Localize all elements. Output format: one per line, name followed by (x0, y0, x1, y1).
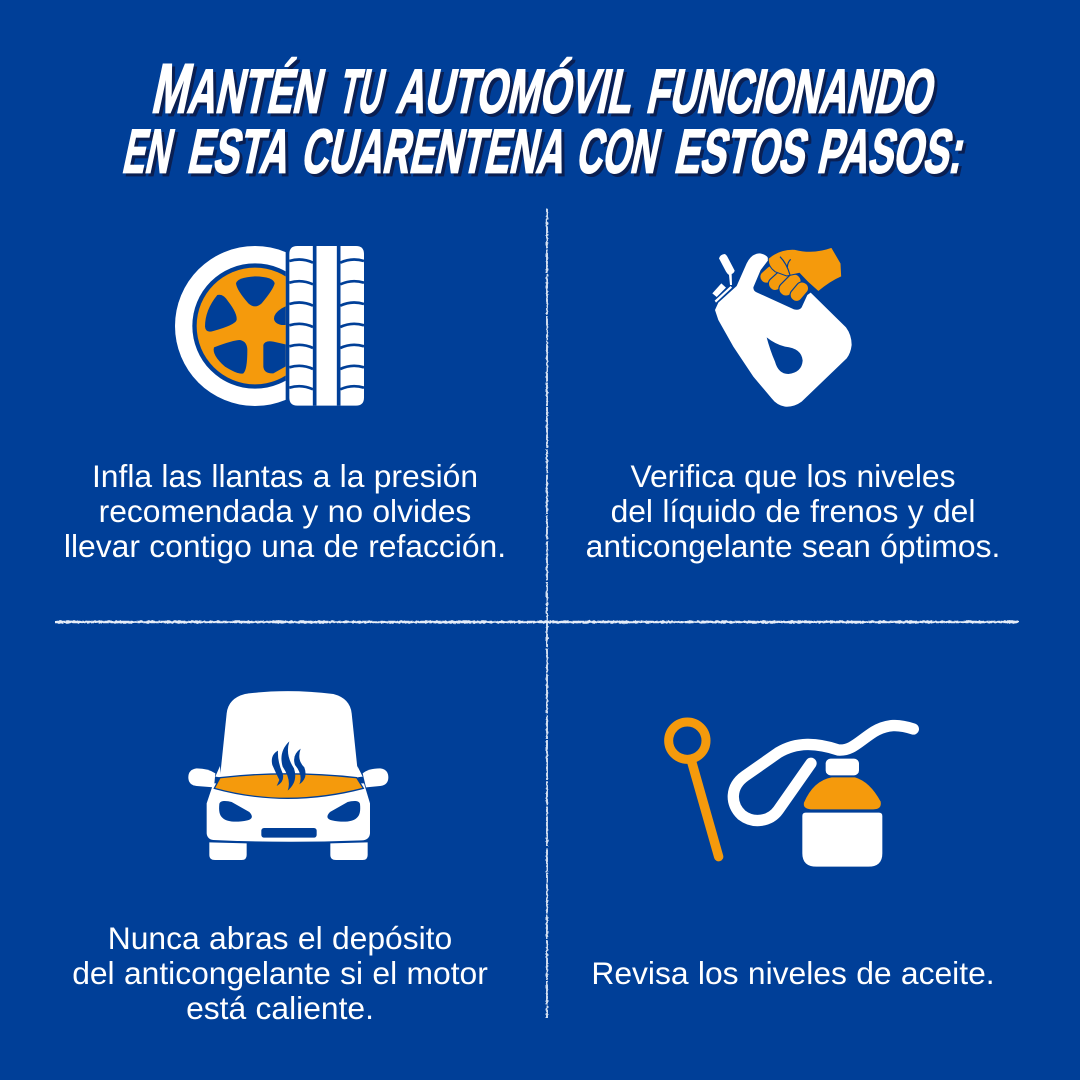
text: tires: Infla las llantas a la presión (92, 458, 478, 494)
text: fluids (586, 458, 1000, 564)
text: oil: Revisa los niveles de aceite. (591, 955, 995, 991)
title: PASOS: (813, 117, 972, 186)
icon: tire and wheel (175, 246, 364, 406)
title: CON (572, 117, 667, 186)
text: radiator warning: del anticongelante si el motor (72, 955, 488, 991)
text: radiator warning (72, 920, 488, 1026)
title (118, 49, 972, 186)
text: fluids: del líquido de frenos y del (611, 493, 975, 529)
title: ESTOS (670, 117, 815, 186)
text: fluids: anticongelante sean óptimos. (586, 528, 1000, 564)
text: radiator warning: está caliente. (186, 990, 374, 1026)
title: TU (334, 57, 391, 126)
title: AUTOMÓVIL (392, 57, 642, 126)
text: fluids: Verifica que los niveles (631, 458, 955, 494)
text: tires (64, 458, 506, 564)
text: tires: llevar contigo una de refacción. (64, 528, 506, 564)
title: EN (118, 117, 180, 186)
title: CUARENTENA (297, 117, 574, 186)
title: ESTA (183, 117, 298, 186)
title: MANTÉN (147, 49, 332, 127)
text: tires: recomendada y no olvides (99, 493, 471, 529)
text: radiator warning: Nunca abras el depósito (108, 920, 452, 956)
